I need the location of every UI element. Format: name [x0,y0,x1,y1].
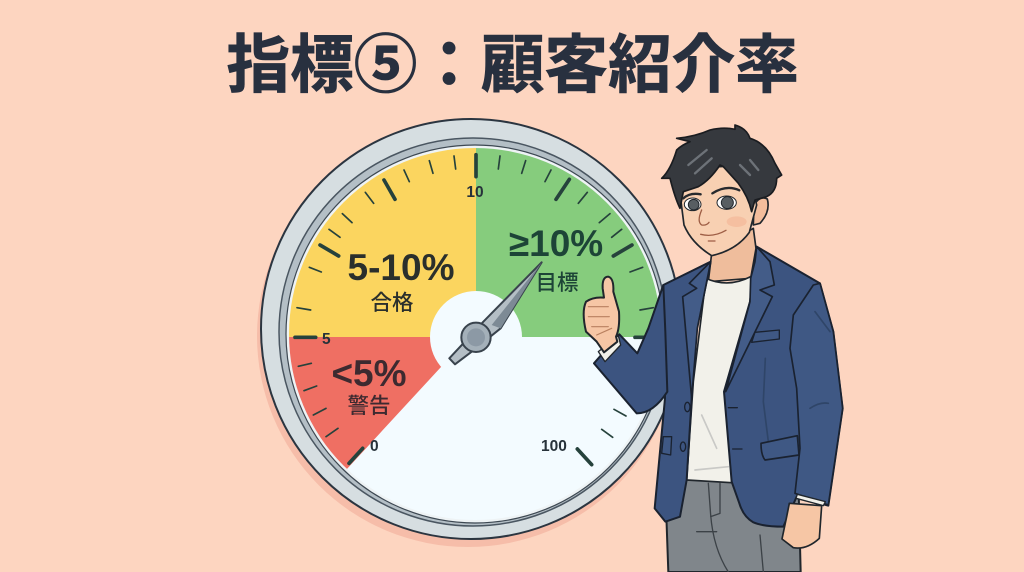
scale numbers: 10 [466,184,484,201]
nose and mouth [699,210,726,241]
label: 10% and above target: 目標 [535,266,579,297]
dial face [289,148,658,520]
neck [708,228,756,282]
eyes [684,196,736,211]
thumbs up hand [584,277,619,352]
tick marks [295,155,653,465]
sleeve [790,283,843,505]
trousers [665,478,801,572]
blush [727,216,747,227]
gauge shadow [257,125,679,547]
character: man giving thumbs up [584,125,843,572]
hip pocket [761,436,799,460]
gauge bezel [261,119,681,539]
lapels [683,262,711,398]
label: 5-10% pass: 5-10% [348,247,454,288]
hair highlights [688,150,758,175]
label: 10% and above target [509,223,603,297]
scale numbers [322,184,567,455]
title: 指標⑤：顧客紹介率 [226,14,799,106]
raised arm [594,285,667,413]
jacket body [655,247,843,527]
label: 10% and above target: ≥10% [509,223,603,264]
gauge dial [257,119,681,547]
green zone: 10% and above [476,148,658,337]
shirt cuff [598,336,621,362]
red zone: below 5% [289,337,442,469]
eyebrows [683,188,739,198]
right cuff and hand [782,494,825,548]
buttons [685,402,690,412]
label: 5-10% pass [348,247,454,317]
face [679,165,757,256]
needle [449,262,542,364]
head [662,125,782,256]
chest pocket [752,330,779,342]
label: below 5% warning: <5% [331,353,407,394]
centre white hub area [430,291,522,367]
white t-shirt [687,277,753,483]
scale numbers: 100 [541,438,567,455]
hair [662,125,782,212]
label: below 5% warning: 警告 [347,389,391,420]
scale numbers: 0 [370,438,379,455]
label: 5-10% pass: 合格 [370,286,414,317]
ear [753,198,768,225]
scale numbers: 5 [322,331,331,348]
yellow zone: 5-10% [280,140,476,337]
label: below 5% warning [331,353,407,420]
